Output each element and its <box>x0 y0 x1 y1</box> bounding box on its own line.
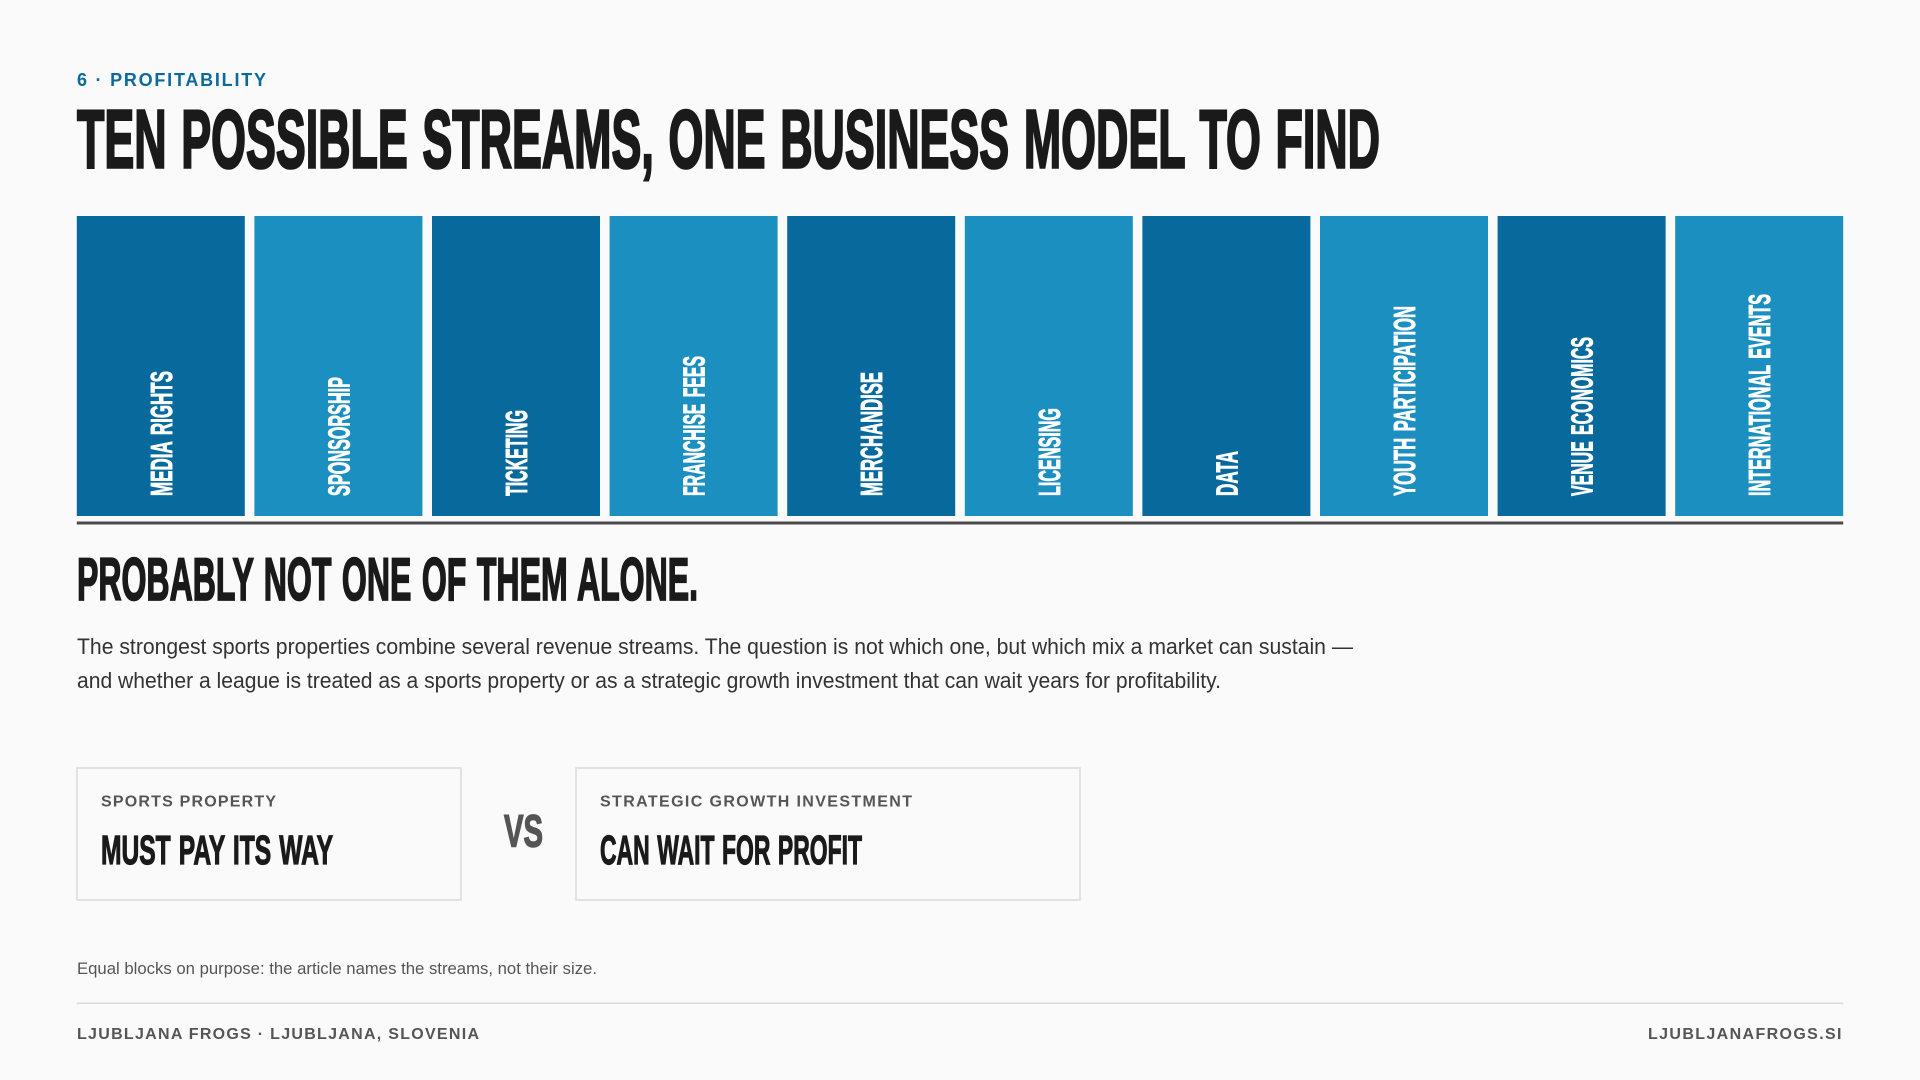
block: venue economics <box>1498 216 1666 516</box>
block: youth participation: YOUTH PARTICIPATION <box>1387 306 1422 496</box>
card: strategic growth investment: STRATEGIC GROWTH INVESTMENT <box>600 794 912 810</box>
vs label: VS <box>504 806 543 856</box>
block: venue economics: VENUE ECONOMICS <box>1565 337 1600 496</box>
body paragraph <box>77 634 1353 693</box>
body paragraph: and whether a league is treated as a sports property or as a strategic growth investment that can wait years for profitability. <box>77 668 1221 693</box>
body paragraph: The strongest sports properties combine several revenue streams. The question is not which one, but which mix a market can sustain — <box>77 634 1353 659</box>
eyebrow: 6 · PROFITABILITY <box>77 70 266 90</box>
block: ticketing: TICKETING <box>499 410 534 496</box>
footer right: LJUBLJANAFROGS.SI <box>1648 1026 1842 1043</box>
card: sports property <box>77 768 461 900</box>
subheading: PROBABLY NOT ONE OF THEM ALONE. <box>77 546 698 613</box>
block: ticketing <box>432 216 600 516</box>
card: strategic growth investment <box>576 768 1080 900</box>
block: international events: INTERNATIONAL EVENTS <box>1742 294 1777 496</box>
block: merchandise <box>787 216 955 516</box>
block: youth participation <box>1320 216 1488 516</box>
block: international events <box>1675 216 1843 516</box>
block: sponsorship: SPONSORSHIP <box>321 377 356 496</box>
block: data <box>1142 216 1310 516</box>
block: sponsorship <box>254 216 422 516</box>
card: sports property: SPORTS PROPERTY <box>101 794 276 810</box>
block: media rights <box>77 216 245 516</box>
card: strategic growth investment: CAN WAIT FOR PROFIT <box>600 827 862 873</box>
footnote: Equal blocks on purpose: the article names the streams, not their size. <box>77 959 597 978</box>
block: merchandise: MERCHANDISE <box>854 372 889 496</box>
block: franchise fees <box>610 216 778 516</box>
block: licensing <box>965 216 1133 516</box>
block: data: DATA <box>1209 451 1244 496</box>
card: sports property: MUST PAY ITS WAY <box>101 827 333 873</box>
block: franchise fees: FRANCHISE FEES <box>677 356 712 496</box>
chart: ten equal revenue stream blocks <box>77 216 1843 516</box>
footer left: LJUBLJANA FROGS · LJUBLJANA, SLOVENIA <box>77 1026 479 1043</box>
block: licensing: LICENSING <box>1032 408 1067 496</box>
block: media rights: MEDIA RIGHTS <box>144 371 179 496</box>
